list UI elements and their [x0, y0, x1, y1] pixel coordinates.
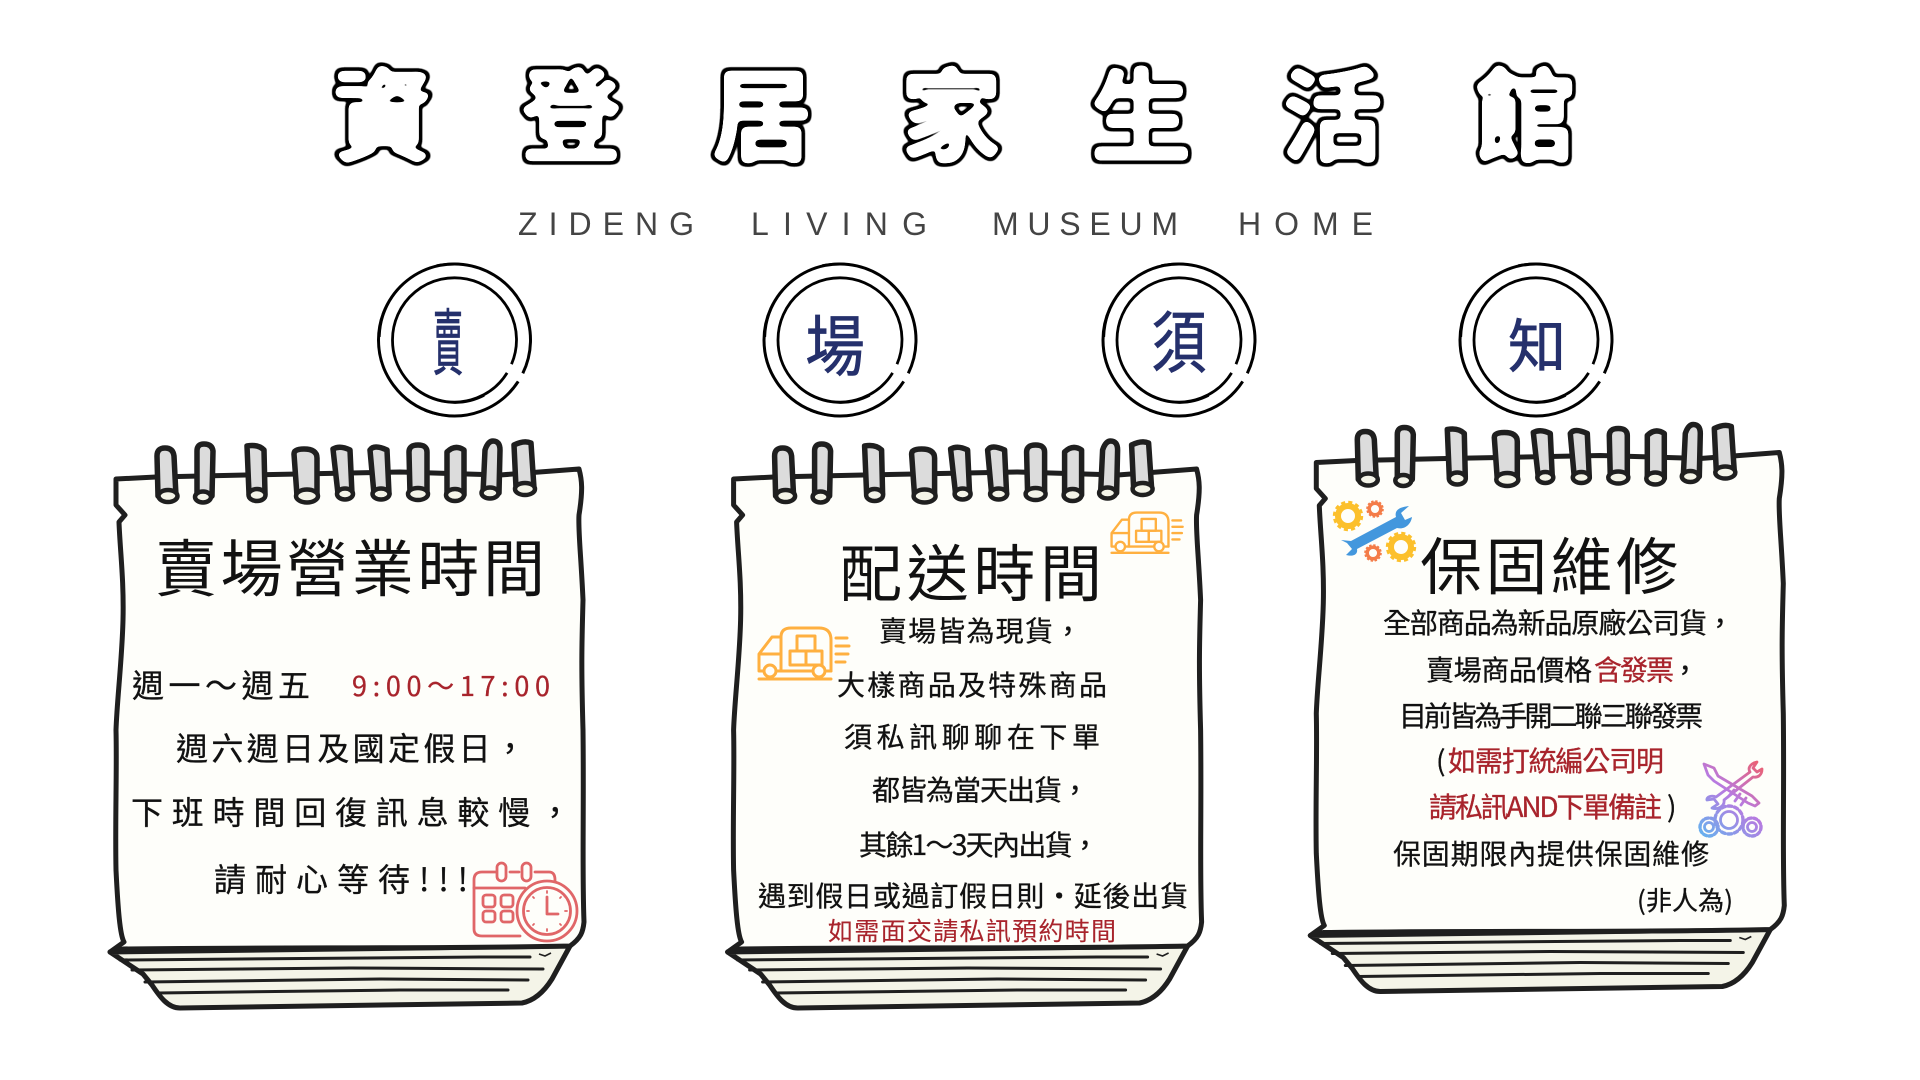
subtitle: ZIDENG LIVING MUSEUM HOME: HOME: [1238, 206, 1373, 242]
circle badge: 須: 須: [1152, 289, 1206, 387]
notebook illustration: [728, 441, 1202, 1008]
text: red meet-up note: 如需面交請私訊預約時間: [828, 912, 1116, 948]
circle badge: 場: 場: [805, 294, 865, 390]
text: non-human: (非人為): [1637, 881, 1733, 918]
heading: 配送時間: 配送時間: [840, 524, 1102, 614]
text: invoice in red: 含發票: [1594, 649, 1674, 689]
text: open paren: (: [1436, 740, 1445, 780]
subtitle: ZIDENG LIVING MUSEUM HOME: [518, 206, 1373, 242]
title: 資登居家生活館: 登: [520, 37, 622, 183]
notebook illustration: [1310, 424, 1784, 992]
text: price includes: 賣場商品價格: [1426, 649, 1592, 689]
heading: 保固維修: 保固維修: [1420, 517, 1678, 607]
circle badge: 賣: [378, 263, 530, 417]
icon: large delivery truck: [759, 628, 849, 679]
text: after hours note: 下班時間回復訊息較慢，: [131, 788, 571, 834]
text: holidays: 遇到假日或過訂假日則‧延後出貨: [758, 875, 1188, 915]
icon: wrench and gears: [1334, 501, 1414, 561]
text: please wait: 請耐心等待!!!: [214, 855, 468, 901]
subtitle: ZIDENG LIVING MUSEUM HOME: ZIDENG: [518, 206, 694, 242]
icon: tools and gears: [1700, 762, 1762, 836]
panel: delivery notebook: [728, 441, 1202, 1008]
subtitle: ZIDENG LIVING MUSEUM HOME: MUSEUM: [992, 206, 1178, 242]
panel: warranty notebook: [1310, 424, 1784, 992]
subtitle: ZIDENG LIVING MUSEUM HOME: LIVING: [751, 206, 927, 242]
text: warranty period: 保固期限內提供保固維修: [1393, 833, 1709, 873]
title: 資登居家生活館: 館: [1474, 37, 1576, 183]
title: 資登居家生活館: 生: [1090, 37, 1192, 183]
circle badge: 須: [1103, 263, 1255, 417]
title: 資登居家生活館: 活: [1281, 37, 1383, 183]
text: new goods: 全部商品為新品原廠公司貨，: [1383, 602, 1734, 642]
text: weekend note: 週六週日及國定假日，: [176, 724, 526, 770]
text: tax ID note: 如需打統編公司明: [1448, 740, 1664, 780]
text: invoice type: 目前皆為手開二聯三聯發票: [1399, 695, 1703, 735]
text: comma: ，: [1671, 649, 1699, 689]
text: same day: 都皆為當天出貨，: [872, 769, 1089, 809]
circle badge: 知: 知: [1508, 300, 1566, 384]
text: weekday hours: 週一～週五: [132, 661, 310, 707]
text: large goods: 大樣商品及特殊商品: [837, 664, 1107, 704]
circle badge: 賣: 賣: [433, 286, 463, 390]
text: close paren: ): [1667, 786, 1676, 826]
title: 資登居家生活館: [332, 37, 1576, 183]
circle badge: 場: [764, 263, 916, 417]
heading: 賣場營業時間: 賣場營業時間: [155, 519, 545, 609]
circle badge: 知: [1460, 263, 1612, 417]
panel: store hours notebook: [110, 441, 584, 1008]
text: remark note: 請私訊AND下單備註: [1429, 786, 1662, 826]
text: hours in red: 9:00～17:00: [352, 665, 550, 704]
title: 資登居家生活館: 家: [900, 37, 1002, 183]
title: 資登居家生活館: 居: [711, 37, 813, 183]
text: remaining: 其餘1～3天內出貨，: [859, 824, 1099, 864]
icon: small delivery truck: [1112, 513, 1183, 553]
text: in-stock note: 賣場皆為現貨，: [879, 610, 1082, 650]
title: 資登居家生活館: 資: [332, 37, 434, 183]
notebook illustration: [110, 441, 584, 1008]
text: private message: 須私訊聊聊在下單: [844, 716, 1100, 756]
icon: calendar and clock: [474, 863, 577, 941]
